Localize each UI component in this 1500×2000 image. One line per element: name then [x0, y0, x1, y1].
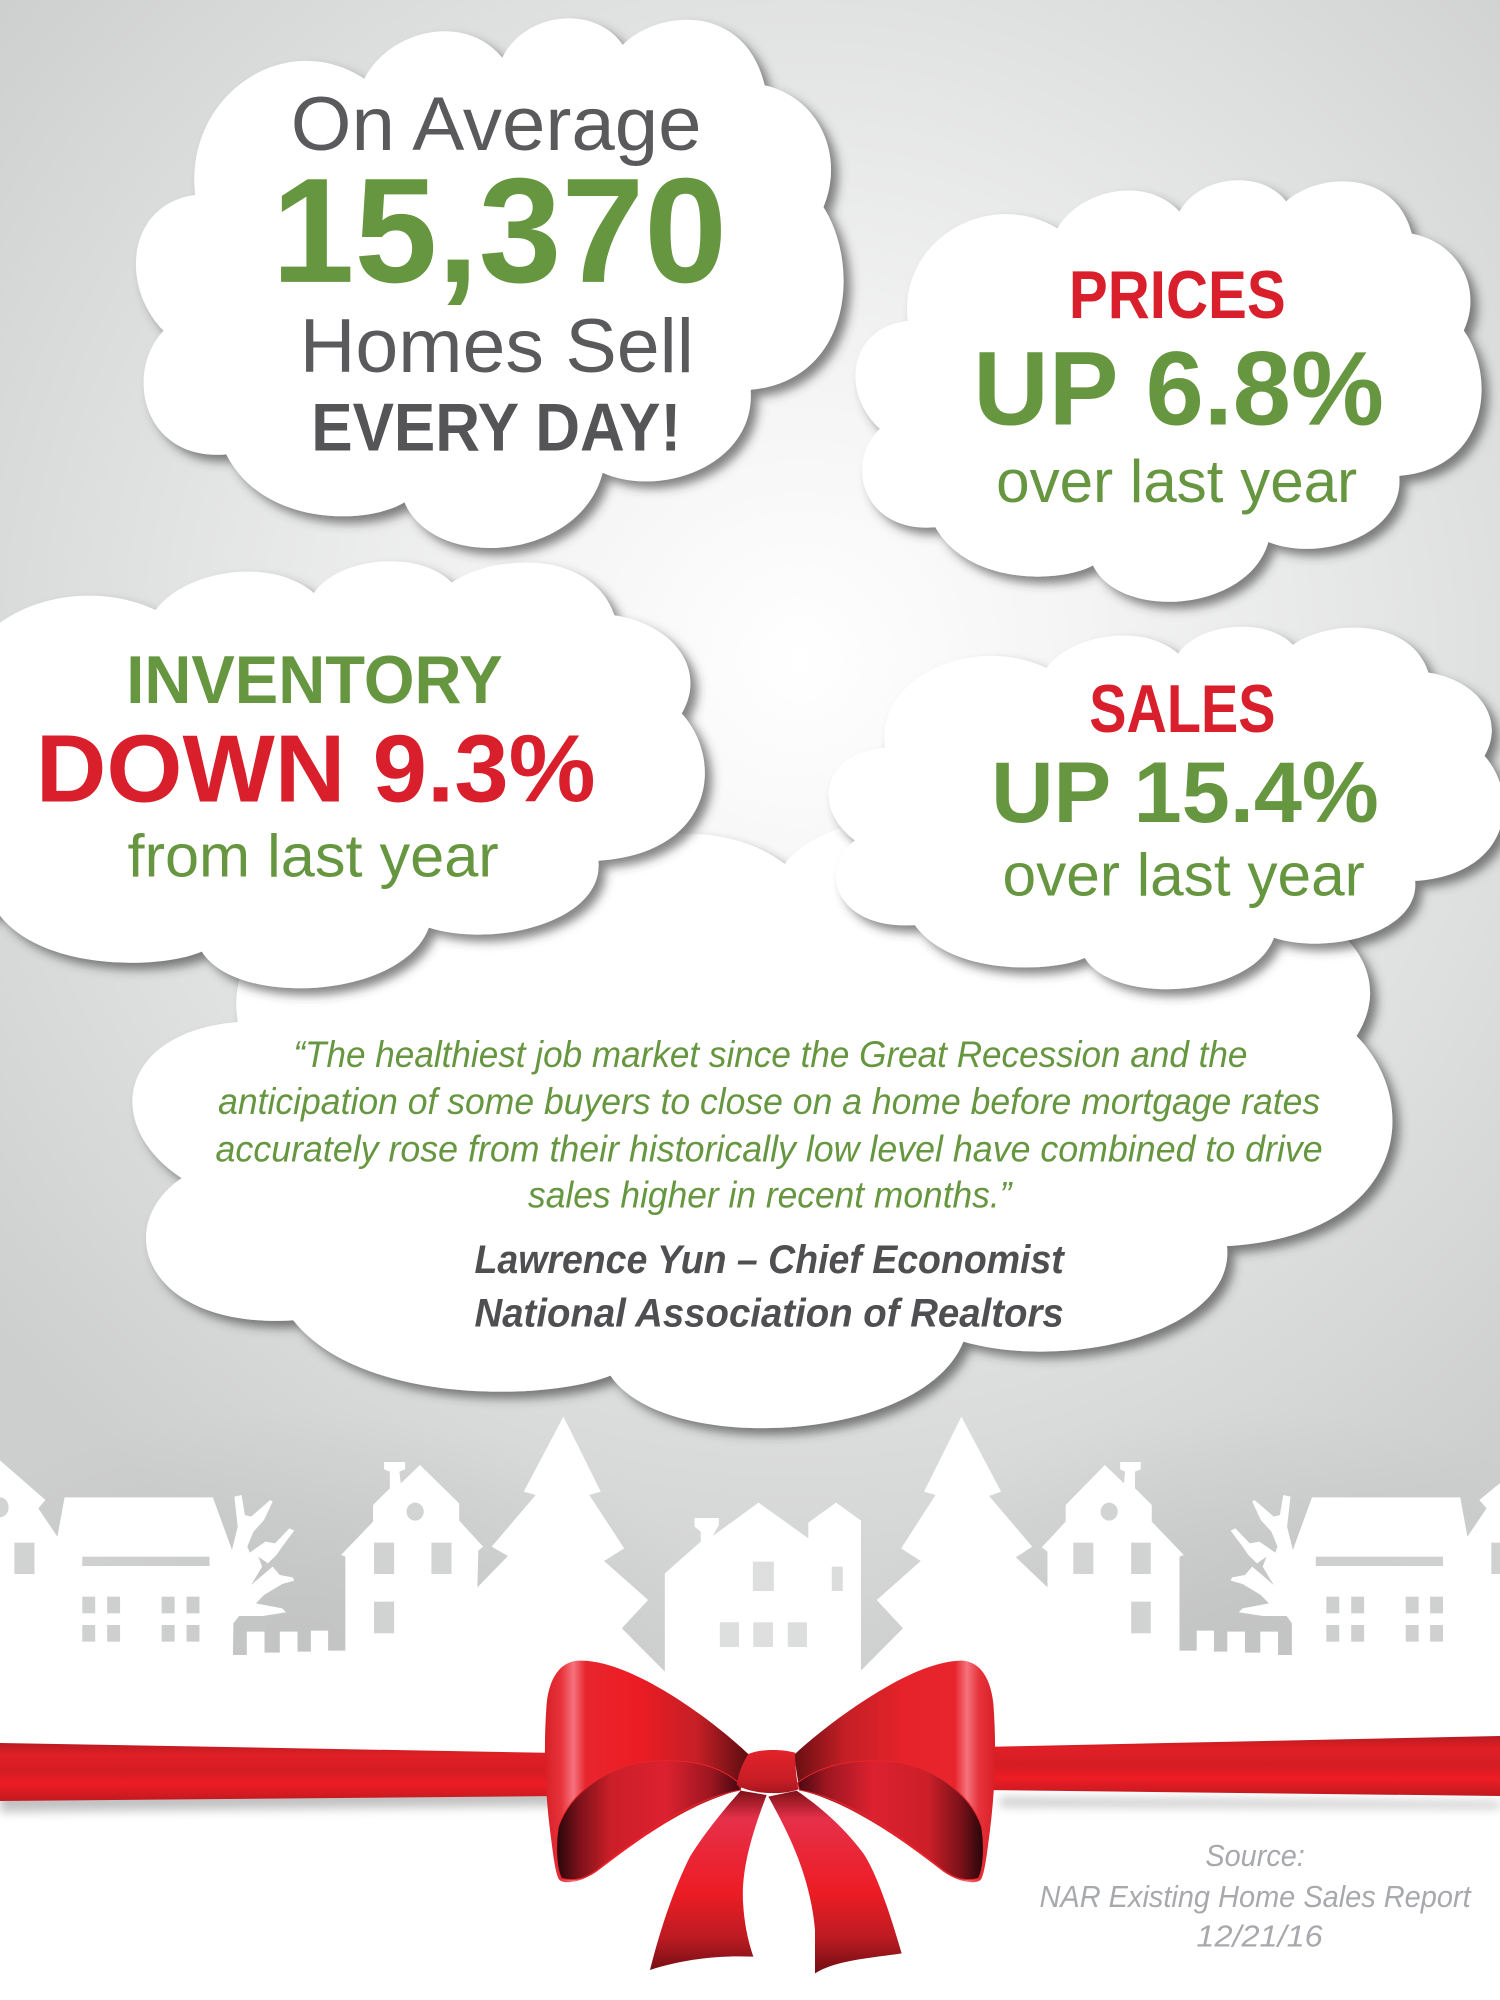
panel: sales cloud: [829, 627, 1500, 989]
red bow: [545, 1661, 995, 1973]
right bow loop: [794, 1661, 995, 1882]
sales cloud shape: [829, 627, 1500, 989]
every day: EVERY DAY!: [311, 390, 681, 465]
prices label: PRICES: [1069, 258, 1286, 333]
left bow loop: [545, 1661, 749, 1882]
panel: inventory cloud: [0, 561, 705, 988]
quote text: sales higher in recent months.”: [528, 1174, 1013, 1215]
left bow tail: [650, 1791, 767, 1970]
prices cloud shape: [855, 180, 1482, 602]
quote cloud shape: [132, 819, 1392, 1428]
heading: on average: On Average: [291, 82, 702, 167]
panel: quote cloud: [132, 819, 1392, 1428]
inventory label: INVENTORY: [126, 643, 503, 718]
source note: 12/21/16: [1196, 1919, 1324, 1953]
quote attribution: Lawrence Yun – Chief Economist: [474, 1238, 1066, 1282]
quote text: “The healthiest job market since the Great Recession and the: [293, 1034, 1247, 1075]
quote text: [216, 1034, 1323, 1215]
prices comparison: over last year: [996, 448, 1357, 515]
snowy village silhouette: [0, 1417, 1500, 2000]
quote text: anticipation of some buyers to close on a home before mortgage rates: [218, 1081, 1320, 1122]
panel: average homes cloud: [136, 18, 844, 548]
sales label: SALES: [1089, 672, 1276, 747]
panel: prices cloud: [855, 180, 1482, 602]
prices value: UP 6.8%: [973, 331, 1384, 448]
quote attribution: [474, 1238, 1066, 1336]
average cloud shape: [136, 18, 844, 548]
homes sell: Homes Sell: [300, 304, 694, 389]
ribbon band: [0, 1736, 1500, 1812]
quote attribution: National Association of Realtors: [474, 1292, 1064, 1336]
quote text: accurately rose from their historically low level have combined to drive: [216, 1128, 1323, 1169]
sales comparison: over last year: [1003, 841, 1365, 908]
source note: [1040, 1839, 1472, 1953]
sales value: UP 15.4%: [991, 744, 1379, 841]
big number: 15,370: [272, 147, 727, 314]
source note: Source:: [1205, 1839, 1305, 1873]
right bow tail: [768, 1791, 902, 1973]
inventory comparison: from last year: [128, 822, 499, 889]
source note: NAR Existing Home Sales Report: [1040, 1880, 1472, 1914]
inventory cloud shape: [0, 561, 705, 988]
inventory value: DOWN 9.3%: [36, 716, 596, 823]
bow knot: [737, 1750, 798, 1793]
